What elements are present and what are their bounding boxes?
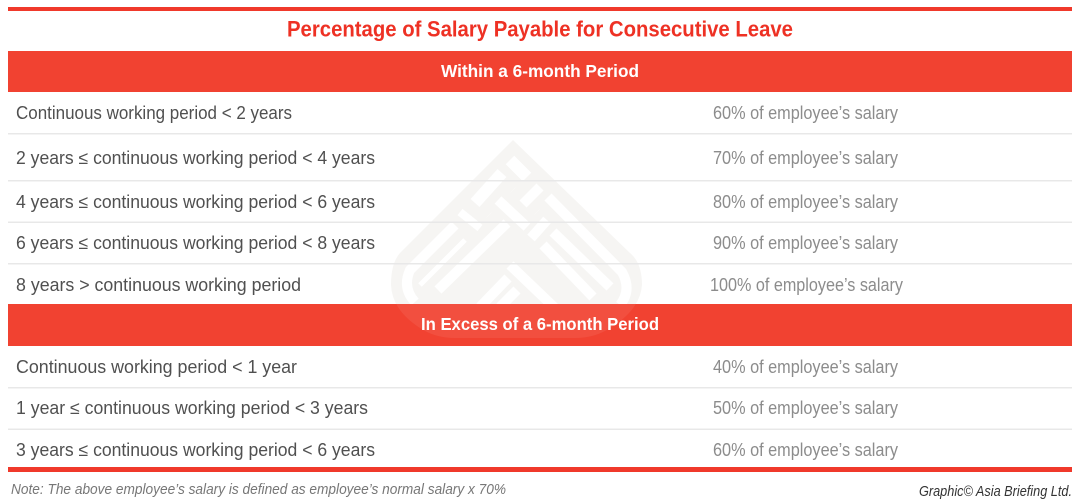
row 4: 6 years ≤ continuous working period < 8 years	[16, 233, 375, 253]
section header: within a 6-month period: Within a 6-month Period	[441, 61, 639, 81]
section header: in excess of a 6-month period	[8, 304, 1072, 346]
bottom red rule	[8, 467, 1072, 472]
row 1: 60% of employee’s salary	[713, 103, 898, 123]
row 7: 50% of employee’s salary	[713, 398, 898, 418]
row 7	[16, 398, 898, 418]
section header: within a 6-month period	[8, 51, 1072, 92]
row 8: 60% of employee’s salary	[713, 440, 898, 460]
row 6: 40% of employee’s salary	[713, 357, 898, 377]
top red rule	[8, 7, 1072, 11]
icon: watermark logo	[391, 140, 642, 338]
row 3	[16, 192, 898, 212]
table rows: in excess of a 6-month period	[16, 357, 898, 460]
row 3: 80% of employee’s salary	[713, 192, 898, 212]
row 1: Continuous working period < 2 years	[16, 103, 292, 123]
row 3: 4 years ≤ continuous working period < 6 years	[16, 192, 375, 212]
row 7: 1 year ≤ continuous working period < 3 years	[16, 398, 368, 418]
row 2: 70% of employee’s salary	[713, 148, 898, 168]
row 5: 8 years > continuous working period	[16, 275, 301, 295]
row 2: 2 years ≤ continuous working period < 4 years	[16, 148, 375, 168]
row 2	[16, 148, 898, 168]
section header: in excess of a 6-month period: In Excess of a 6-month Period	[421, 314, 659, 334]
row 4: 90% of employee’s salary	[713, 233, 898, 253]
row 5: 100% of employee’s salary	[710, 275, 903, 295]
row 8	[16, 440, 898, 460]
footnote: Note: The above employee’s salary is defined as employee’s normal salary x 70%	[11, 481, 506, 498]
title: Percentage of Salary Payable for Consecutive Leave	[287, 16, 793, 42]
row 8: 3 years ≤ continuous working period < 6 years	[16, 440, 375, 460]
row 6: Continuous working period < 1 year	[16, 357, 297, 377]
row 6	[16, 357, 898, 377]
row 4	[16, 233, 898, 253]
table rows: within a 6-month period	[16, 103, 903, 295]
row 1	[16, 103, 898, 123]
row 5	[16, 275, 903, 295]
